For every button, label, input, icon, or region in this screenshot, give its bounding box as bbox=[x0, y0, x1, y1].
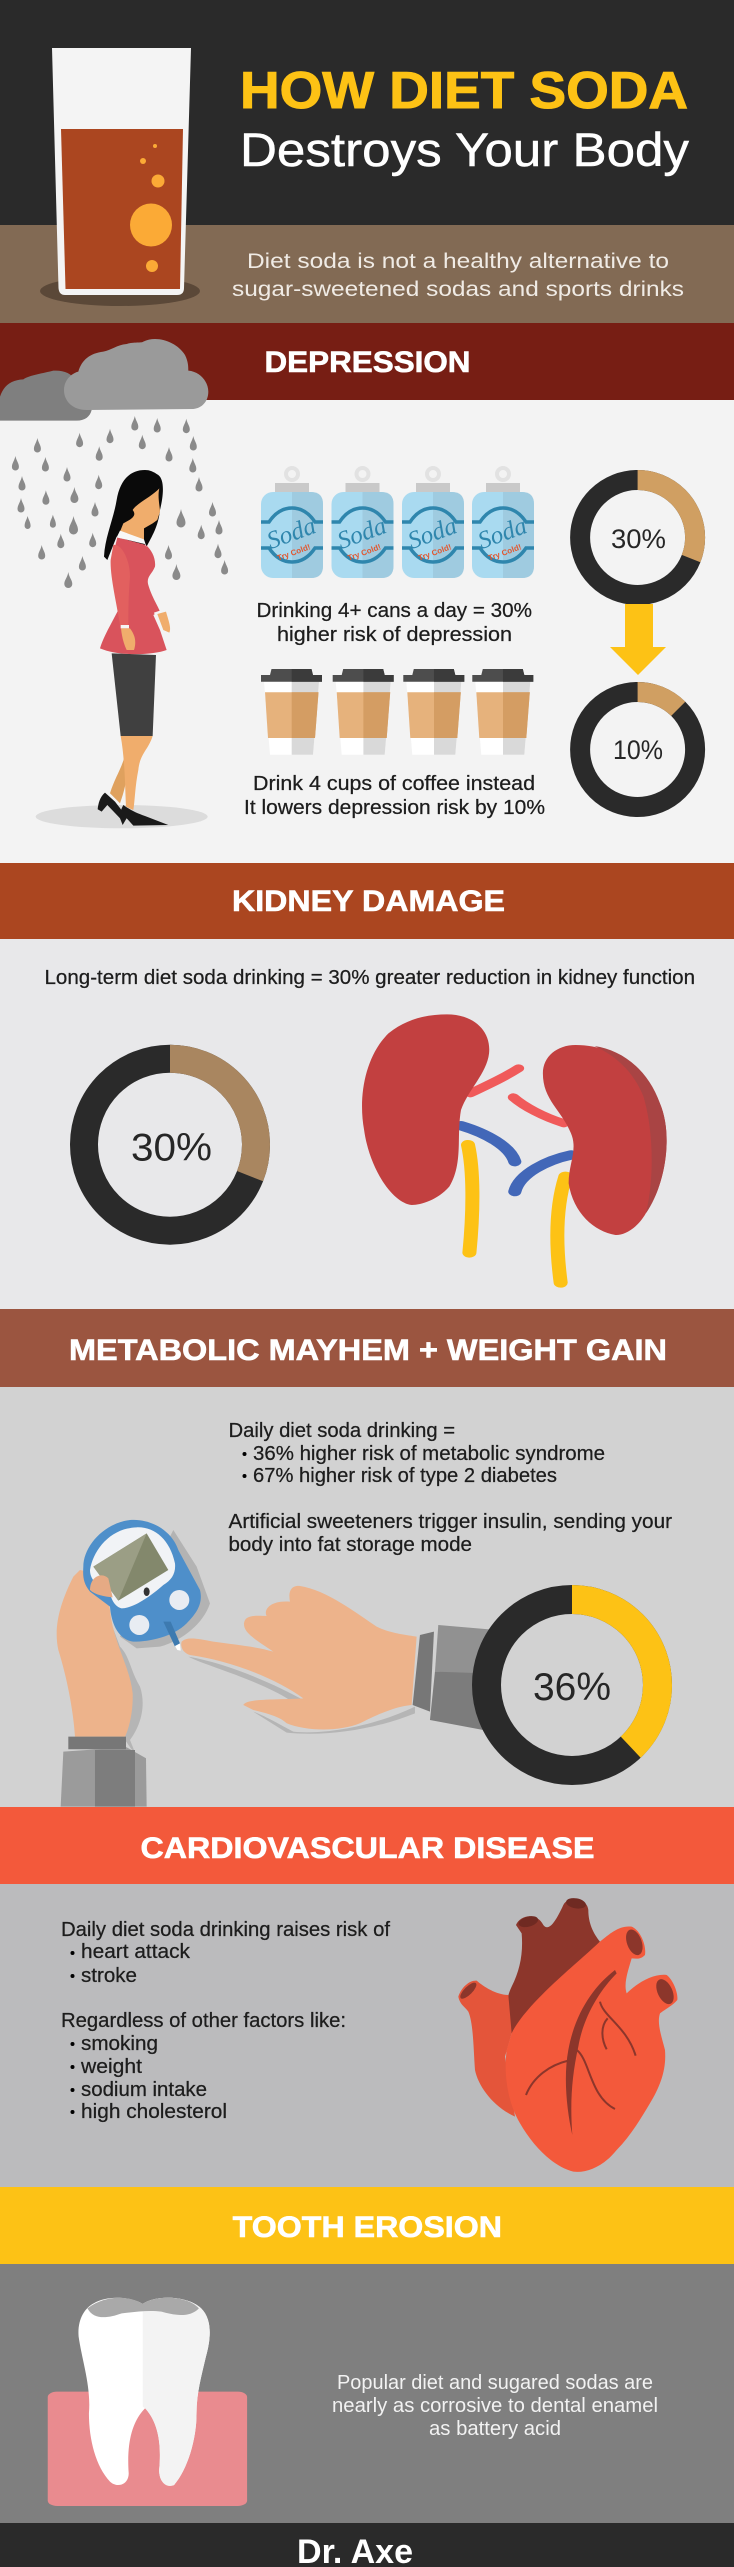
cup 2 bbox=[333, 669, 394, 755]
title: HOW DIET SODA bbox=[240, 62, 688, 120]
title bbox=[240, 62, 690, 176]
can 1 bbox=[261, 468, 323, 578]
text: risks and factors: heart attack bbox=[81, 1941, 191, 1963]
cup 4 bbox=[472, 669, 533, 755]
text: cans risk: Drinking 4+ cans a day = 30% bbox=[256, 600, 532, 622]
can 3: Try Cold! bbox=[417, 542, 453, 563]
heading: depression: DEPRESSION bbox=[264, 346, 470, 379]
text: risks and factors: weight bbox=[80, 2056, 142, 2078]
text: risks and factors: sodium intake bbox=[81, 2079, 207, 2101]
illustration: kidneys bbox=[362, 1014, 667, 1283]
can 4 bbox=[472, 468, 534, 578]
can 2: Try Cold! bbox=[346, 542, 382, 563]
donut chart: 30%: 30% bbox=[611, 524, 666, 554]
donut chart: 36% bbox=[486, 1600, 658, 1770]
icon: soda cans bbox=[261, 468, 534, 578]
text: metabolic risks: 36% higher risk of metabolic syndrome bbox=[253, 1443, 605, 1465]
text: metabolic risks: Daily diet soda drinking = bbox=[228, 1420, 455, 1442]
heading: tooth erosion: TOOTH EROSION bbox=[233, 2211, 502, 2244]
donut chart: 30% bbox=[580, 480, 695, 595]
illustration: woman bbox=[36, 470, 208, 828]
icon: rain clouds bbox=[0, 339, 208, 421]
text: corrosive comparison: nearly as corrosive to dental enamel bbox=[332, 2395, 658, 2417]
can 3 bbox=[402, 468, 464, 578]
text: coffee benefit: It lowers depression risk by 10% bbox=[244, 797, 545, 819]
donut chart: 10% bbox=[580, 692, 695, 807]
rain drops bbox=[12, 416, 228, 588]
text: metabolic risks: body into fat storage mode bbox=[228, 1534, 472, 1556]
can 3: Soda bbox=[404, 512, 461, 555]
donut chart: 30%: 30% bbox=[131, 1126, 212, 1170]
text: risks and factors: Regardless of other factors like: bbox=[61, 2010, 346, 2032]
text: metabolic risks: 67% higher risk of type 2 diabetes bbox=[253, 1465, 557, 1487]
subtitle bbox=[232, 250, 684, 301]
donut chart: 36%: 36% bbox=[533, 1666, 611, 1709]
text: corrosive comparison bbox=[332, 2372, 658, 2440]
illustration: tooth in gum bbox=[48, 2298, 247, 2506]
text: risks and factors: smoking bbox=[81, 2033, 158, 2055]
subtitle: Diet soda is not a healthy alternative to bbox=[247, 250, 669, 273]
can 1: Try Cold! bbox=[276, 542, 312, 563]
panel: depression bbox=[0, 323, 734, 863]
text: cans risk bbox=[256, 600, 532, 646]
heading: kidney damage: KIDNEY DAMAGE bbox=[232, 885, 505, 918]
cup 3 bbox=[403, 669, 464, 755]
heading: metabolic mayhem: METABOLIC MAYHEM + WEIGHT GAIN bbox=[69, 1334, 667, 1367]
text: kidney function: Long-term diet soda drinking = 30% greater reduction in kidney function bbox=[44, 967, 695, 989]
text: risks and factors: Daily diet soda drinking raises risk of bbox=[61, 1919, 390, 1941]
cup 1 bbox=[261, 669, 322, 755]
can 1: Soda bbox=[263, 512, 320, 555]
donut chart: 10%: 10% bbox=[613, 735, 663, 765]
illustration: glucose meter and hands bbox=[57, 1520, 497, 1807]
footer: Dr. Axe bbox=[0, 2523, 734, 2567]
donut chart: 30% bbox=[84, 1059, 256, 1231]
panel: tooth erosion bbox=[0, 2187, 734, 2523]
heading: cardiovascular disease: CARDIOVASCULAR DISEASE bbox=[140, 1832, 594, 1865]
title: Destroys Your Body bbox=[240, 123, 690, 176]
icon: coffee cups bbox=[261, 669, 533, 755]
text: risks and factors: high cholesterol bbox=[81, 2101, 227, 2123]
text: metabolic risks bbox=[228, 1420, 672, 1556]
text: corrosive comparison: Popular diet and sugared sodas are bbox=[337, 2372, 653, 2394]
icon: glass of soda bbox=[40, 48, 200, 306]
text: coffee benefit: Drink 4 cups of coffee instead bbox=[253, 773, 535, 795]
can 2 bbox=[332, 468, 394, 578]
can 4: Soda bbox=[474, 512, 531, 555]
panel: metabolic mayhem bbox=[0, 1309, 734, 1807]
can 2: Soda bbox=[334, 512, 390, 555]
text: metabolic risks: Artificial sweeteners trigger insulin, sending your bbox=[228, 1511, 672, 1533]
text: cans risk: higher risk of depression bbox=[277, 624, 512, 646]
panel: cardiovascular disease bbox=[0, 1807, 734, 2187]
can 4: Try Cold! bbox=[487, 542, 523, 563]
text: coffee benefit bbox=[244, 773, 545, 819]
panel: kidney damage bbox=[0, 863, 734, 1309]
panel: title header bbox=[0, 0, 734, 323]
text: risks and factors: stroke bbox=[81, 1965, 137, 1987]
illustration: heart bbox=[458, 1897, 677, 2172]
text: corrosive comparison: as battery acid bbox=[429, 2418, 561, 2440]
arrow: down bbox=[610, 604, 666, 675]
subtitle: sugar-sweetened sodas and sports drinks bbox=[232, 278, 684, 301]
text: risks and factors bbox=[61, 1919, 390, 2123]
